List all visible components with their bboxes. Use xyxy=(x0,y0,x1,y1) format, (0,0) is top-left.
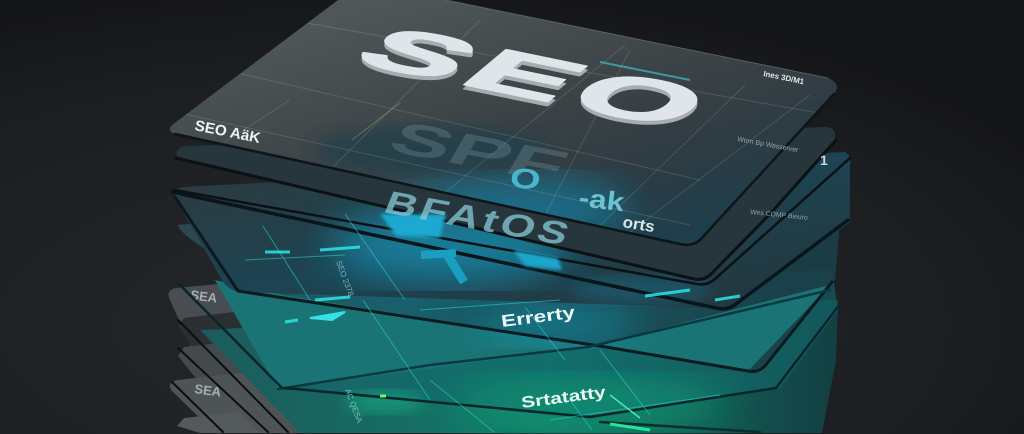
text: O overlay: O xyxy=(508,162,542,196)
chart lines: glowing grid on lower layers xyxy=(245,214,740,432)
label: left slab text upper: SEA xyxy=(190,287,219,306)
card: middle teal layer xyxy=(178,165,845,389)
heading: SEO 3D title: SEO xyxy=(336,19,738,145)
text: orts label: orts xyxy=(621,214,656,236)
text: small right label: Worn Bp Wasserver xyxy=(737,136,800,154)
text: index digit: 1 xyxy=(820,152,828,168)
card: bottom green layers xyxy=(200,270,838,433)
text: card label bottom left: SEO AäK xyxy=(193,117,262,147)
text: ak overlay: -ak xyxy=(577,184,627,218)
text: faded reflected letters: SPF xyxy=(380,113,577,192)
scene: artwork xyxy=(168,0,850,433)
left grey card edges xyxy=(168,282,340,433)
panel: blue screen seen through xyxy=(175,20,830,244)
bottom glass edges xyxy=(172,140,850,432)
heading: SEO 3D title: SEO xyxy=(336,15,738,141)
text: vertical tiny grid label: SEO 2378 xyxy=(334,260,356,298)
label: left slab text lower: SEA xyxy=(194,381,223,400)
card: blue layer xyxy=(174,152,850,309)
text: vertical tiny grid label lower: AC QESA xyxy=(343,388,364,425)
card: upper blue layer xyxy=(176,127,835,279)
text: Errerty label: Errerty xyxy=(500,303,576,331)
text: card label top right: Ines 3D/M1 xyxy=(763,69,805,86)
text: Stratatty label: Srtatatty xyxy=(520,382,607,411)
text: bottom small right label: Wes COMP Bieuro xyxy=(750,209,808,222)
card: top glass panel xyxy=(170,0,837,245)
text: faded middle heading: BFAtOS xyxy=(379,185,578,253)
